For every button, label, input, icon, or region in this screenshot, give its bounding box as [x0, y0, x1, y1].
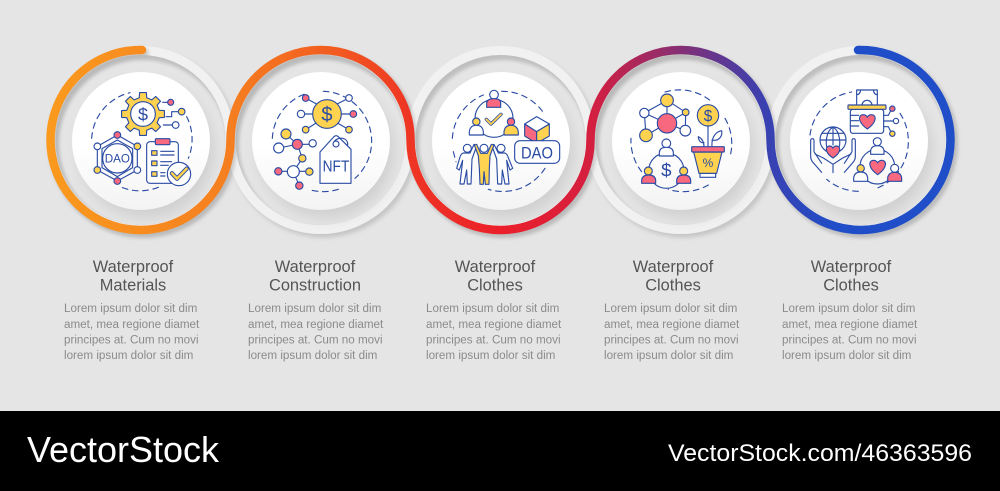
text block: Waterproof Clothes 1: principes at. Cum no movi [426, 334, 561, 346]
text block: Waterproof Clothes 2: amet, mea regione diamet [604, 318, 740, 331]
text block: Waterproof Materials: principes at. Cum no movi [64, 334, 199, 346]
text block: Waterproof Clothes 3: lorem ipsum dolor sit dim [782, 349, 911, 362]
icon: NFT coin network: $ [321, 104, 333, 126]
icon: NFT coin network: NFT [323, 158, 350, 175]
text block: Waterproof Construction: lorem ipsum dolor sit dim [248, 349, 377, 362]
text block: Waterproof Construction: principes at. Cum no movi [248, 334, 383, 346]
text block: Waterproof Construction: Waterproof [275, 258, 356, 276]
text block: Waterproof Clothes 1: Lorem ipsum dolor sit dim [426, 302, 559, 315]
icon: team, cube and DAO: DAO [521, 144, 553, 163]
text block: Waterproof Materials: Materials [100, 276, 166, 294]
icon: network, money people and plant: $ [661, 160, 672, 181]
text block: Waterproof Materials: Waterproof [93, 258, 174, 276]
icon: NFT coin network [272, 91, 372, 192]
footer image id: VectorStock.com/46363596 [668, 440, 972, 467]
icon: network, money people and plant [631, 90, 732, 192]
text block: Waterproof Clothes 3 [782, 258, 918, 362]
text block: Waterproof Clothes 3: Lorem ipsum dolor sit dim [782, 302, 915, 315]
gradient ribbon [51, 50, 953, 233]
text block: Waterproof Materials [64, 258, 200, 362]
icon: DAO, gear and checklist [92, 93, 192, 191]
text block: Waterproof Clothes 1: Clothes [467, 276, 523, 294]
text block: Waterproof Clothes 1: Waterproof [455, 258, 536, 276]
icon: network, money people and plant: % [703, 156, 714, 170]
icon: team, cube and DAO [452, 90, 560, 191]
ring tracks and discs [46, 46, 958, 238]
text block: Waterproof Clothes 1 [426, 258, 562, 362]
text block: Waterproof Construction [248, 258, 384, 362]
text block: Waterproof Construction: Lorem ipsum dolor sit dim [248, 302, 381, 315]
text block: Waterproof Clothes 2: lorem ipsum dolor sit dim [604, 349, 733, 362]
text block: Waterproof Clothes 2: Waterproof [633, 258, 714, 276]
text block: Waterproof Clothes 3: principes at. Cum no movi [782, 334, 917, 346]
text block: Waterproof Clothes 3: Clothes [823, 276, 879, 294]
icon: charity hearts and globe [810, 90, 908, 191]
icon: network, money people and plant: $ [704, 108, 713, 125]
text block: Waterproof Materials: amet, mea regione diamet [64, 318, 200, 331]
text block: Waterproof Construction: amet, mea regione diamet [248, 318, 384, 331]
text block: Waterproof Clothes 1: lorem ipsum dolor sit dim [426, 349, 555, 362]
text block: Waterproof Clothes 2: Lorem ipsum dolor sit dim [604, 302, 737, 315]
text block: Waterproof Clothes 1: amet, mea regione diamet [426, 318, 562, 331]
text block: Waterproof Materials: lorem ipsum dolor sit dim [64, 349, 193, 362]
text block: Waterproof Clothes 3: amet, mea regione diamet [782, 318, 918, 331]
text block: Waterproof Clothes 3: Waterproof [811, 258, 892, 276]
text block: Waterproof Clothes 2: principes at. Cum no movi [604, 334, 739, 346]
footer band [0, 411, 1000, 491]
text block: Waterproof Clothes 2 [604, 258, 740, 362]
text block: Waterproof Materials: Lorem ipsum dolor sit dim [64, 302, 197, 315]
text block: Waterproof Clothes 2: Clothes [645, 276, 701, 294]
icon: DAO, gear and checklist: $ [138, 105, 148, 125]
footer logo: VectorStock [27, 429, 220, 470]
icon: DAO, gear and checklist: DAO [105, 153, 130, 166]
text block: Waterproof Construction: Construction [269, 276, 361, 294]
